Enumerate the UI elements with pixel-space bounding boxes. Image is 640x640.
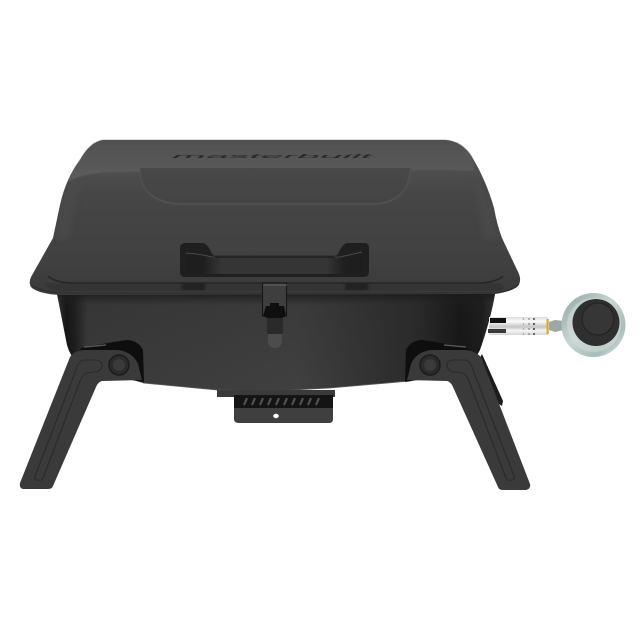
hose fitting <box>489 317 548 335</box>
latch <box>262 283 287 348</box>
lid: flange band <box>44 283 504 291</box>
lid: raised top plane <box>68 140 474 182</box>
product illustration: portable gas grill <box>20 139 626 490</box>
brand logo: masterbuilt <box>172 153 377 160</box>
right leg <box>407 350 530 490</box>
leg bracket highlights <box>84 345 466 347</box>
gas regulator <box>488 293 626 357</box>
bowl: firebox body <box>57 294 495 391</box>
lower vent bracket <box>217 390 335 423</box>
lid: embossed top panel <box>140 168 410 203</box>
lid handle <box>180 243 369 277</box>
regulator dial <box>562 293 626 357</box>
left leg pivot recess <box>78 340 144 382</box>
lid: main hood with flange <box>30 140 520 295</box>
handle shadow on flange <box>182 283 368 290</box>
left leg <box>20 350 142 489</box>
lid: side shading <box>58 191 491 214</box>
rear right leg edge <box>478 354 503 406</box>
right leg pivot recess <box>405 340 471 382</box>
